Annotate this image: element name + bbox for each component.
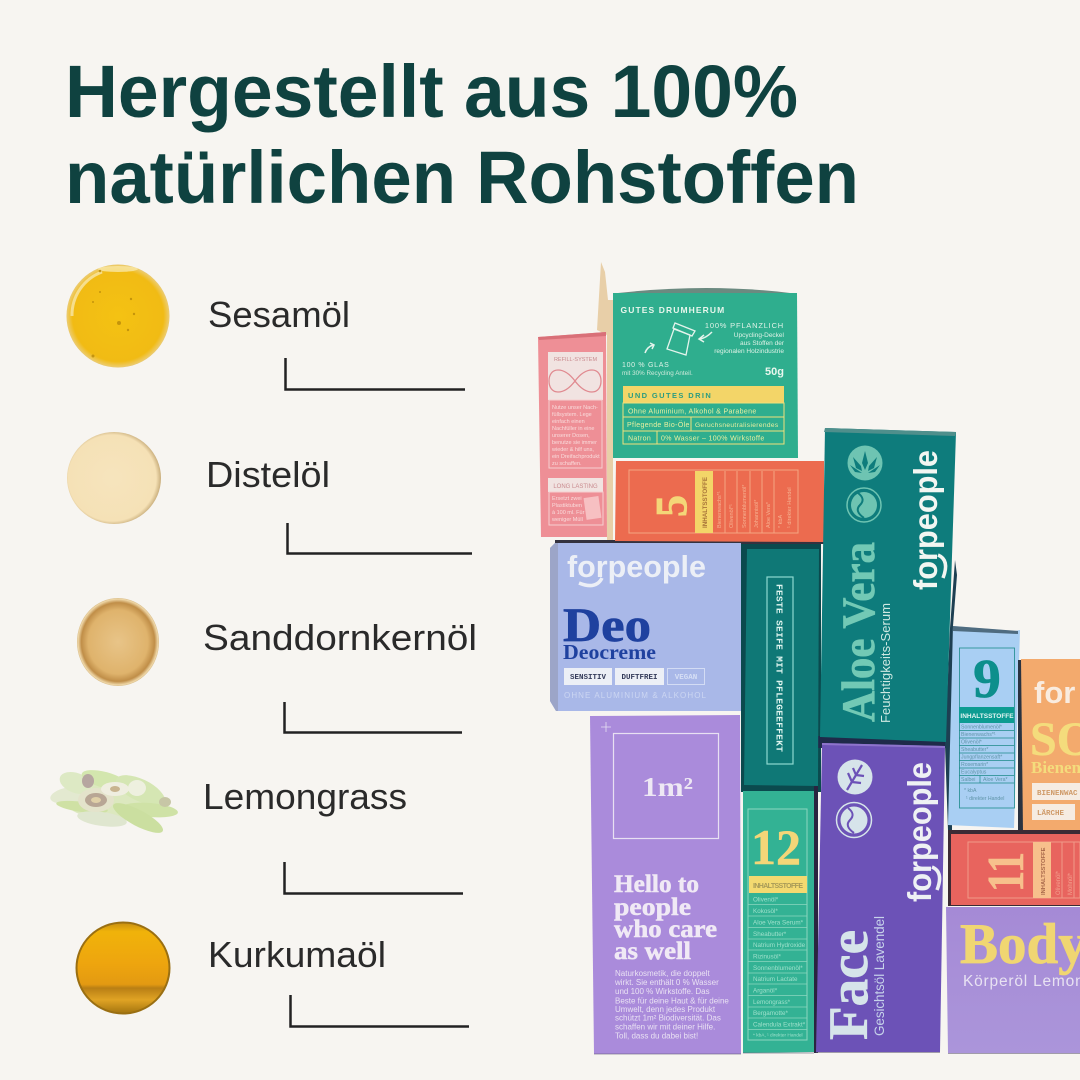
panel: purple 1m² box: Toll, dass du dabei bist! bbox=[615, 1032, 698, 1040]
panel: purple 1m² box: und 100 % Wirkstoffe. Das bbox=[615, 987, 710, 996]
panel: purple 1m² box: schützt 1m² Biodiversität. Das bbox=[615, 1014, 721, 1022]
panel: orange box 5: Bienenwachs*¹ bbox=[717, 491, 723, 528]
panel: orange box 5 bbox=[615, 461, 824, 542]
panel: purple 1m² box: as well bbox=[614, 938, 691, 965]
panel: green box 12: Lemongrass* bbox=[753, 999, 791, 1006]
panel: light blue box 9: Salbei bbox=[961, 777, 975, 783]
icon: agave bbox=[848, 446, 882, 480]
panel: orange box 5: 5 bbox=[647, 495, 696, 517]
panel: purple 1m² box: schaffen wir mit deiner Hilfe. bbox=[615, 1022, 715, 1032]
panel: violet Face box bbox=[816, 743, 945, 1052]
icon: infinity loop bbox=[549, 370, 601, 392]
panel: teal Aloe Vera box: Feuchtigkeits-Serum bbox=[878, 603, 893, 723]
panel: green box 12: Olivenöl* bbox=[753, 896, 779, 904]
panel: green deo box: GUTES DRUMHERUM bbox=[620, 305, 725, 315]
panel: light blue box 9: Bienenwachs*¹ bbox=[961, 732, 996, 738]
panel: blue Deo box: Deo bbox=[563, 599, 651, 652]
panel: orange box 5: ¹ direkter Handel bbox=[787, 487, 793, 528]
panel: green deo box: UND GUTES DRIN bbox=[628, 391, 712, 400]
panel: red box 11: 11 bbox=[978, 852, 1035, 892]
ingredient: Sesamöl: Sesamöl bbox=[208, 294, 350, 335]
panel: pink refill box: Nutze unser Nach- bbox=[552, 405, 598, 411]
panel: pink refill box: à 100 ml. Für bbox=[552, 510, 585, 516]
panel: pink refill box: benutze sie immer bbox=[552, 440, 597, 446]
panel: blue Deo box bbox=[550, 543, 741, 711]
panel: green box 12: INHALTSSTOFFE bbox=[753, 883, 803, 890]
panel: light blue box 9: Eucalyptus bbox=[961, 770, 987, 776]
ingredient: Kurkumaöl: Kurkumaöl bbox=[208, 934, 386, 975]
ingredient: Distelöl bbox=[67, 432, 330, 524]
panel: orange box Sonnen bbox=[1018, 659, 1080, 834]
panel: pink refill box: zu schaffen. bbox=[552, 461, 582, 467]
panel: green deo box: Upcycling-Deckel bbox=[734, 332, 785, 339]
panel: violet Face box: Face bbox=[818, 930, 879, 1040]
panel: light blue box 9: Sheabutter* bbox=[961, 747, 988, 753]
panel: purple 1m² box: Naturkosmetik, die doppelt bbox=[615, 969, 710, 978]
panel: light blue box 9: Olivenöl* bbox=[961, 740, 982, 746]
panel: green box 12: Aloe Vera Serum* bbox=[753, 920, 804, 926]
panel: light blue box 9: ¹ direkter Handel bbox=[966, 796, 1004, 802]
panel: red box 11: Mohnöl* bbox=[1068, 872, 1074, 895]
panel: pink refill box: LONG LASTING bbox=[553, 484, 598, 490]
panel: green deo box: Pflegende Bio-Öle bbox=[627, 421, 690, 429]
panel: green box 12: Arganöl* bbox=[753, 988, 778, 994]
panel: pink refill box: weniger Müll bbox=[551, 517, 583, 523]
panel: red box 11: Olivenöl* bbox=[1056, 870, 1062, 895]
panel: orange box 5: Olivenöl*¹ bbox=[729, 504, 735, 528]
panel: orange box Sonnen: for bbox=[1034, 675, 1075, 710]
panel: purple 1m² box: Beste für deine Haut & für deine bbox=[615, 996, 729, 1006]
panel: purple 1m² box: Umwelt, denn jedes Produkt bbox=[615, 1005, 716, 1014]
panel: blue Deo box: Deocreme bbox=[563, 640, 656, 664]
panel: orange box 5: * kbA bbox=[778, 515, 784, 528]
panel: purple 1m² box: wirkt. Sie enthält 0 % Wasser bbox=[614, 978, 719, 987]
panel: pink refill box: einfach einen bbox=[552, 419, 585, 425]
panel: pink refill box: wieder & hilf uns, bbox=[551, 447, 594, 453]
panel: green box 12: Sheabutter* bbox=[753, 931, 787, 938]
title: Hergestellt aus 100% bbox=[65, 50, 798, 133]
panel: light blue box 9: Rosemarin* bbox=[961, 762, 988, 768]
panel: teal Aloe Vera box: Aloe Vera bbox=[833, 542, 885, 722]
logo: forpeople: forpeople bbox=[901, 762, 938, 902]
ingredient: Kurkumaöl bbox=[76, 922, 386, 1014]
panel: blue Deo box: OHNE ALUMINIUM & ALKOHOL bbox=[564, 691, 707, 700]
panel: orange box 5: Johannisöl* bbox=[754, 499, 760, 528]
ingredient: Sanddornkernöl bbox=[77, 598, 477, 686]
panel: green box 12 bbox=[743, 791, 814, 1053]
panel: light blue box 9: Jungpflanzensaft* bbox=[961, 754, 1002, 760]
panel: green deo box: 100% PFLANZLICH bbox=[705, 321, 784, 330]
panel: orange box 5: Aloe Vera* bbox=[766, 501, 772, 528]
panel: orange box Sonnen: BIENENWAC bbox=[1037, 790, 1078, 798]
panel: pink refill box: Nachfüller in eine bbox=[552, 426, 594, 432]
panel: pink refill box: REFILL-SYSTEM bbox=[554, 357, 597, 363]
panel: green deo box: aus Stoffen der bbox=[740, 340, 785, 347]
panel: purple Body box bbox=[946, 907, 1080, 1053]
icon: arrows bbox=[645, 332, 712, 353]
panel: pink refill box: ein Dreifachprodukt bbox=[552, 454, 600, 460]
panel: pink refill box bbox=[538, 332, 607, 537]
panel: purple 1m² box: Hello to bbox=[614, 871, 699, 898]
panel: green box 12: Kokosöl* bbox=[753, 908, 778, 915]
panel: purple 1m² box: 1m² bbox=[642, 772, 693, 802]
panel: green deo box: Ohne Aluminium, Alkohol & Parabene bbox=[628, 408, 757, 416]
panel: green box 12: Natrium Lactate bbox=[753, 976, 798, 983]
panel: purple 1m² box bbox=[590, 715, 741, 1054]
panel: teal soap box: FESTE SEIFE MIT PFLEGEEFFEKT bbox=[774, 584, 784, 752]
panel: pink refill box: füllsystem. Lege bbox=[552, 412, 592, 418]
connector line 3 bbox=[284, 702, 462, 732]
ingredient: Lemongrass bbox=[49, 766, 407, 838]
panel: green deo box: Geruchsneutralisierendes bbox=[695, 422, 779, 429]
panel: red box 11: INHALTSSTOFFE bbox=[1041, 847, 1047, 895]
panel: violet Face box: Gesichtsöl Lavendel bbox=[872, 916, 887, 1036]
title bbox=[65, 50, 859, 219]
panel: red box 11 bbox=[948, 830, 1080, 906]
panel: green box 12: 12 bbox=[751, 819, 801, 875]
panel: light blue box 9: Aloe Vera* bbox=[983, 777, 1008, 783]
panel: orange box 5: INHALTSSTOFFE bbox=[702, 476, 709, 528]
panel: green box 12: Calendula Extrakt* bbox=[753, 1022, 806, 1028]
icon: lavender sprig bbox=[838, 760, 872, 794]
panel: green deo box: regionalen Holzindustrie bbox=[714, 348, 784, 355]
panel: green deo box: Natron bbox=[628, 436, 651, 442]
panel: teal Aloe Vera box bbox=[820, 428, 956, 742]
panel: orange box 5: Sonnenblumenöl* bbox=[742, 484, 748, 528]
panel: light blue box 9 bbox=[948, 626, 1020, 828]
icon: glass jar bbox=[667, 323, 695, 355]
panel: light blue box 9: Sonnenblumenöl* bbox=[961, 724, 1002, 730]
panel: blue Deo box: DUFTFREI bbox=[621, 674, 658, 682]
panel: green deo box: 100 % GLAS bbox=[622, 362, 669, 369]
connector line 2 bbox=[288, 523, 472, 554]
panel: light blue box 9: 9 bbox=[973, 648, 1001, 709]
panel: green deo box: 0% Wasser – 100% Wirkstoffe bbox=[661, 436, 765, 442]
connector line 4 bbox=[284, 862, 463, 894]
panel: green box 12: Rizinusöl* bbox=[753, 954, 782, 960]
panel: green deo box: mit 30% Recycling Anteil. bbox=[622, 370, 693, 377]
ingredient: Lemongrass: Lemongrass bbox=[203, 776, 407, 817]
panel: teal soap box bbox=[744, 549, 819, 786]
panel: green deo box: 50g bbox=[765, 366, 784, 378]
connector line 1 bbox=[286, 358, 465, 390]
ingredient: Distelöl: Distelöl bbox=[206, 454, 330, 495]
panel: orange box Sonnen: LÄRCHE bbox=[1037, 809, 1065, 818]
ingredient: Sanddornkernöl: Sanddornkernöl bbox=[203, 617, 477, 658]
icon: face profile badge bbox=[847, 488, 881, 522]
panel: light blue box 9: * kbA bbox=[964, 788, 977, 794]
panel: green deo box bbox=[613, 288, 798, 458]
panel: green box 12: Sonnenblumenöl* bbox=[753, 965, 803, 972]
ingredient: Sesamöl bbox=[66, 264, 350, 368]
panel: orange box Sonnen: Bienen bbox=[1031, 758, 1080, 777]
panel: pink refill box: Plastiktuben bbox=[552, 503, 582, 509]
panel: pink refill box: Ersetzt zwei bbox=[552, 496, 582, 502]
connector line 5 bbox=[290, 995, 469, 1026]
logo: forpeople: forpeople bbox=[567, 549, 706, 584]
panel: green box 12: Bergamotte* bbox=[753, 1010, 789, 1017]
panel: light blue box 9: INHALTSSTOFFE bbox=[960, 713, 1014, 720]
panel: pink refill box: unserer Dosen, bbox=[552, 433, 590, 439]
title: natürlichen Rohstoffen bbox=[65, 136, 859, 219]
panel: blue Deo box: VEGAN bbox=[675, 674, 697, 682]
panel: green box 12: * kbA, ¹ direkter Handel bbox=[753, 1032, 803, 1038]
box: stack shadows and backing bbox=[555, 262, 957, 1053]
panel: purple 1m² box: who care bbox=[614, 916, 717, 943]
panel: blue Deo box: SENSITIV bbox=[570, 674, 606, 682]
panel: green box 12: Natrium Hydroxide bbox=[753, 942, 806, 949]
logo: forpeople: forpeople bbox=[907, 450, 944, 590]
bottom shadow line under boxes bbox=[594, 1052, 1080, 1054]
panel: purple 1m² box: people bbox=[614, 894, 691, 921]
icon: face profile badge bbox=[836, 802, 872, 838]
